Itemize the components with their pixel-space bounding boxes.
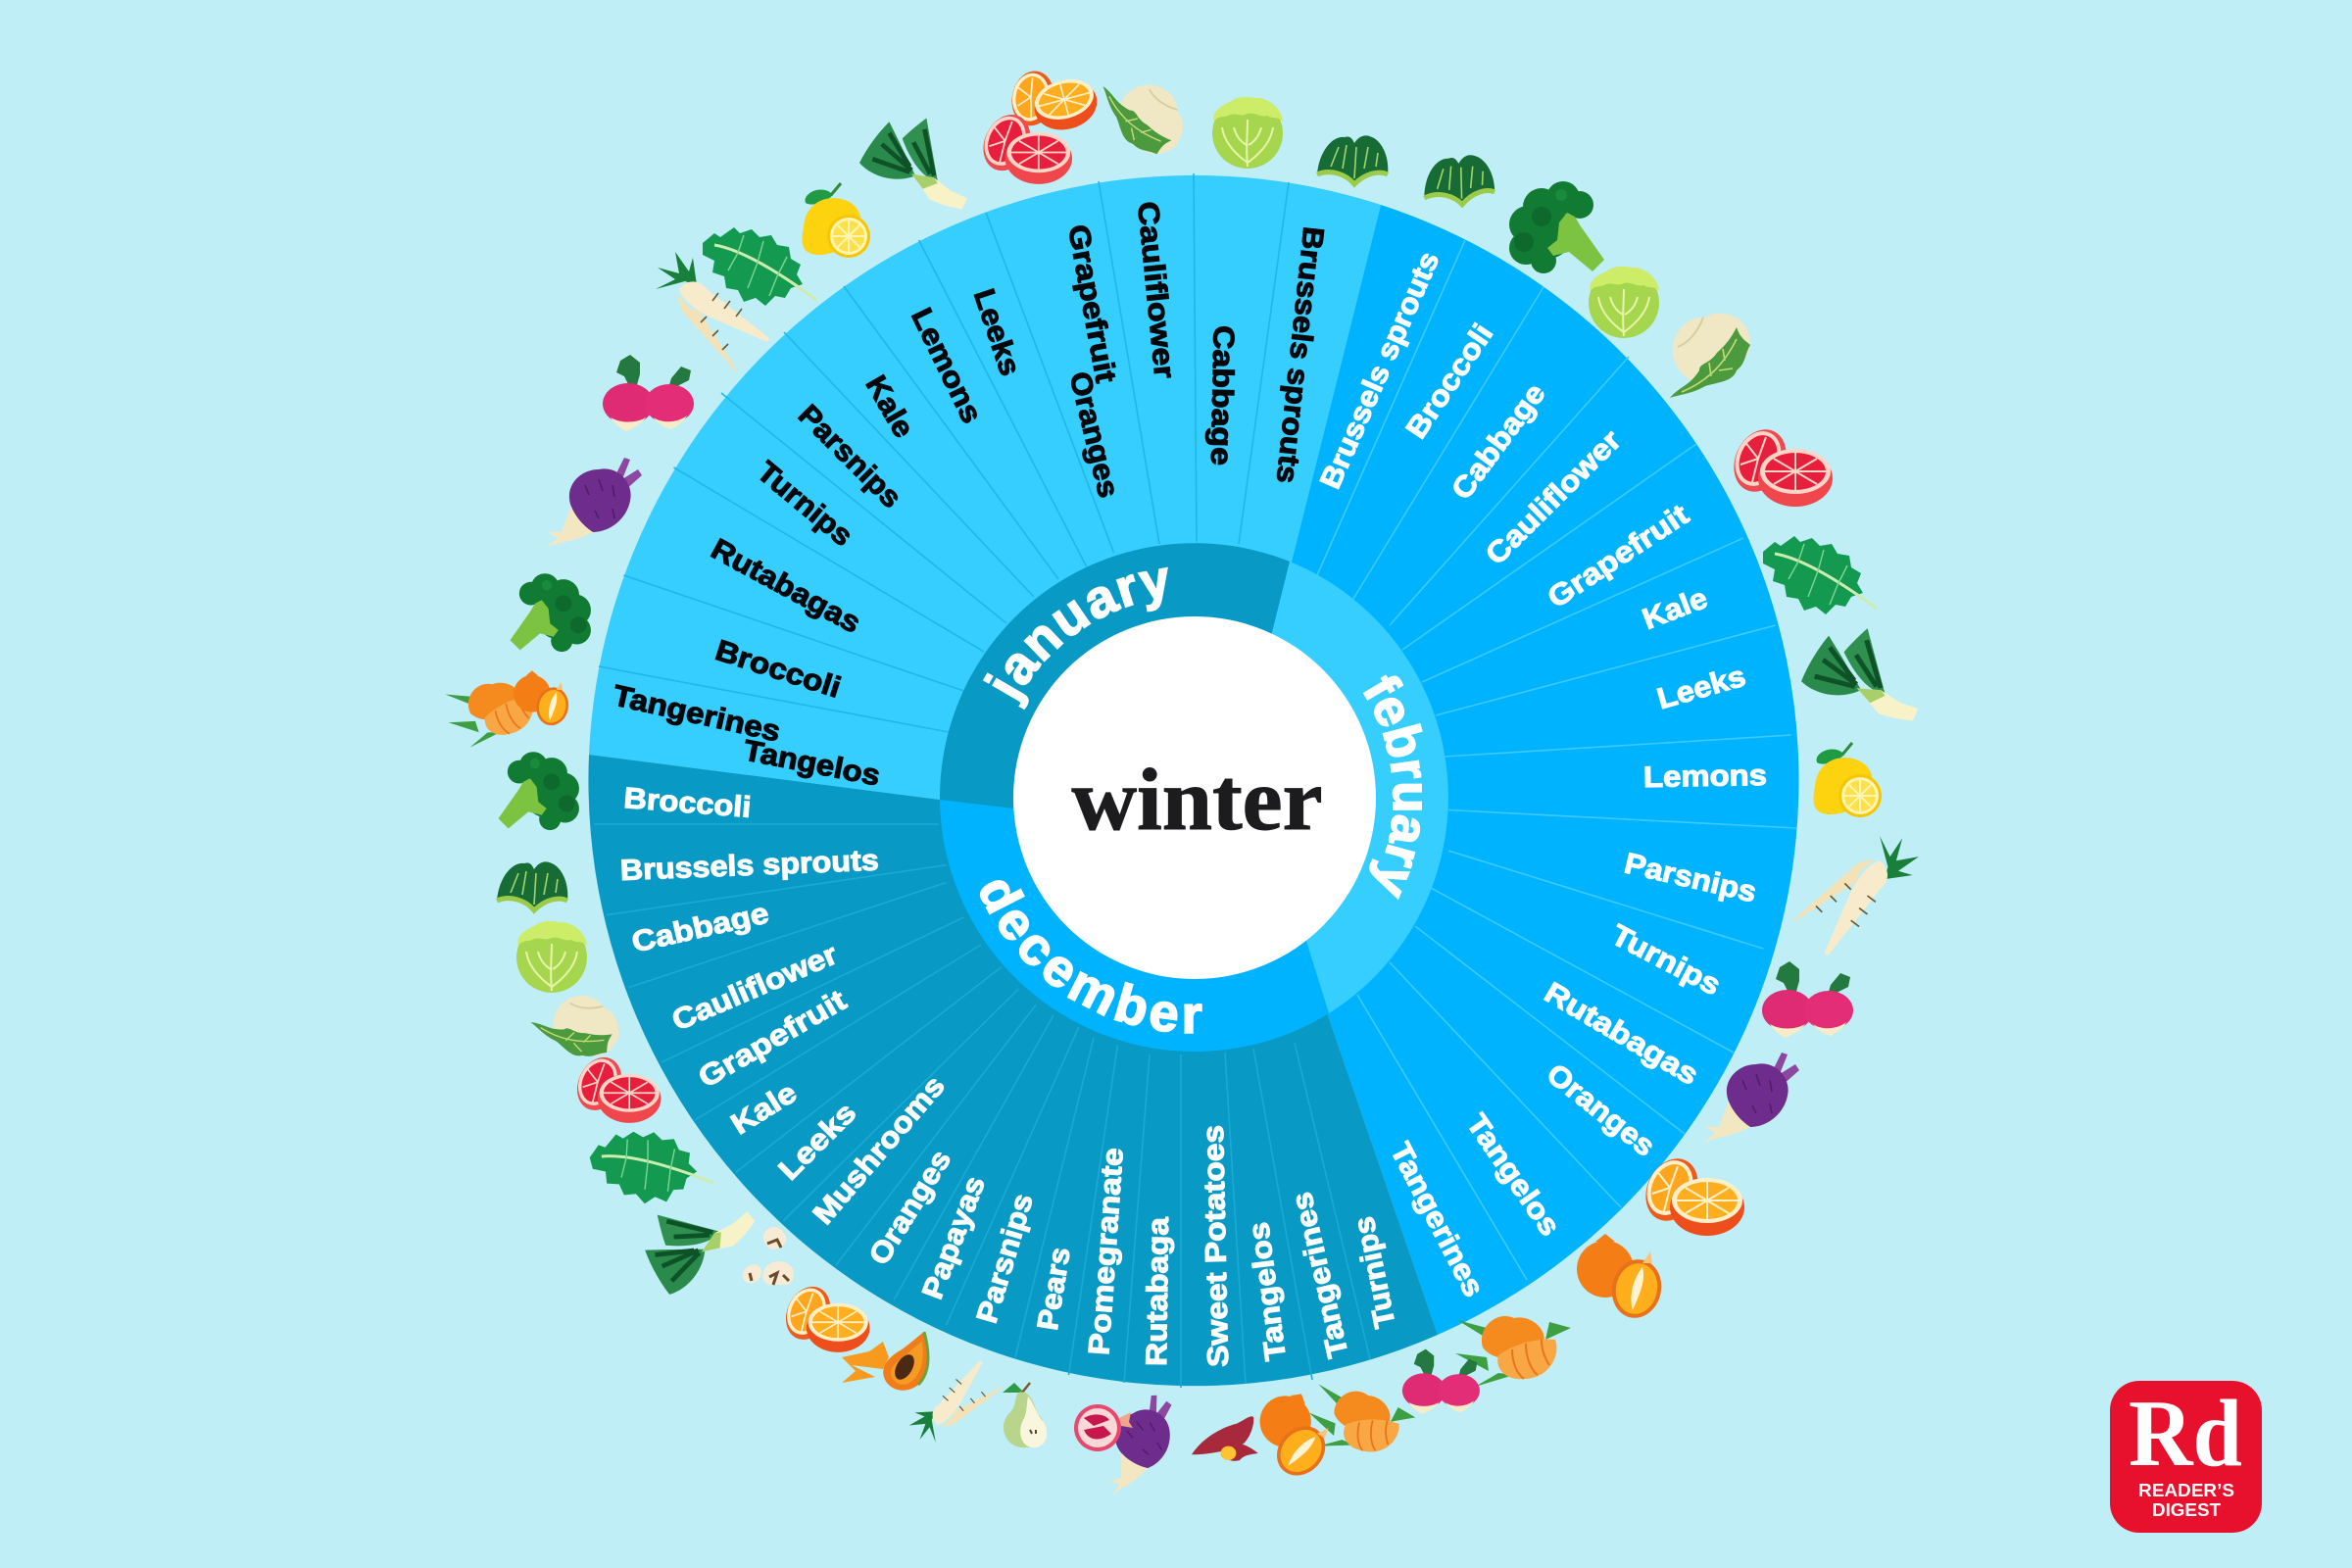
labels: february: Parsnips	[1621, 848, 1759, 908]
icon: rutabaga	[546, 458, 642, 548]
labels: january: Lemons	[905, 303, 988, 428]
icon: tangerine	[1455, 1316, 1571, 1387]
icon: rutabaga	[1703, 1053, 1799, 1143]
icon: grapefruit	[974, 107, 1072, 184]
labels: january: Oranges	[1062, 368, 1125, 501]
icon: grapefruit	[568, 1050, 661, 1123]
labels: february	[1314, 247, 1767, 1302]
labels: february: Broccoli	[1400, 318, 1499, 445]
labels: february: Brussels sprouts	[1314, 247, 1446, 494]
month label: february: february	[1362, 674, 1423, 900]
labels: february: Turnips	[1605, 918, 1726, 1003]
icon: broccoli	[510, 573, 591, 652]
labels: december: Turnips	[1348, 1214, 1402, 1331]
icon: pomegranate	[1074, 1404, 1133, 1451]
icon: cauliflower	[530, 981, 629, 1078]
ring: february	[1231, 562, 1448, 1013]
labels: january	[610, 200, 1329, 793]
icon: sweet potato	[1192, 1416, 1258, 1461]
icon: mushrooms	[743, 1227, 794, 1285]
title: winter: winter	[1072, 752, 1323, 849]
labels: february: Leeks	[1653, 661, 1749, 715]
labels: january: Parsnips	[792, 399, 907, 514]
labels: december: Tangelos	[1243, 1220, 1293, 1362]
labels: january: Grapefruit	[1061, 222, 1122, 385]
labels: december	[619, 782, 1402, 1367]
labels: january: Turnips	[751, 456, 858, 553]
icon: cabbage	[516, 921, 587, 993]
labels: december: Sweet Potatoes	[1198, 1125, 1235, 1367]
icon: cabbage	[1212, 97, 1283, 169]
labels: january: Tangelos	[741, 734, 883, 793]
labels: february: Lemons	[1643, 760, 1767, 794]
icon: orange halves	[1636, 1151, 1744, 1236]
labels: january: Rutabagas	[706, 533, 865, 640]
icon: leeks	[859, 118, 967, 210]
labels: december: Cauliflower	[667, 938, 843, 1038]
labels: february: Cabbage	[1446, 378, 1552, 506]
icon: turnips	[1402, 1349, 1480, 1414]
icon: kale	[1763, 536, 1877, 614]
icon: parsnip	[907, 1355, 1004, 1447]
labels: december: Grapefruit	[693, 984, 852, 1095]
panel: february produce	[1195, 205, 1799, 1335]
ring: january	[940, 543, 1290, 830]
labels: december: Mushrooms	[807, 1070, 952, 1231]
icon: cabbage	[1589, 267, 1659, 338]
labels: january: Cauliflower	[1131, 200, 1181, 380]
icon: tangelo	[514, 670, 572, 728]
labels: january: Cabbage	[1204, 325, 1240, 466]
labels: january: Leeks	[967, 285, 1026, 380]
labels: december: Oranges	[863, 1145, 957, 1271]
center circle	[1013, 616, 1376, 979]
icon: pear	[1003, 1383, 1047, 1447]
ring: december	[940, 798, 1329, 1052]
icon: kale	[586, 1113, 715, 1218]
icon: orange halves	[995, 50, 1102, 144]
icon: lemon	[1813, 743, 1882, 817]
icon: parsnip	[1793, 836, 1919, 956]
icon: orange halves	[777, 1279, 870, 1352]
labels: december: Parsnips	[971, 1190, 1040, 1327]
month label: december: december	[980, 880, 1202, 1034]
labels: january: Brussels sprouts	[1270, 225, 1329, 485]
labels: december: Brussels sprouts	[619, 845, 879, 887]
labels: december: Rutabaga	[1141, 1216, 1175, 1366]
labels: february: Kale	[1639, 582, 1712, 636]
wedge: january	[589, 175, 1381, 800]
labels: february: Cauliflower	[1480, 423, 1628, 571]
icon: broccoli	[498, 752, 579, 830]
icon: tangelo	[1577, 1234, 1667, 1323]
icon: grapefruit	[1724, 421, 1833, 507]
labels: december: Broccoli	[622, 782, 753, 824]
labels: january: Tangerines	[610, 679, 783, 749]
labels: february: Oranges	[1541, 1057, 1661, 1163]
icon: lemon	[802, 183, 870, 258]
labels: december: Cabbage	[629, 897, 771, 959]
logo: Reader's Digest	[2110, 1381, 2262, 1533]
icon: kale	[703, 227, 816, 306]
labels: december: Pomegranate	[1083, 1147, 1130, 1356]
icon: brussels sprouts	[1317, 135, 1388, 184]
icon: broccoli	[1509, 181, 1604, 273]
icon: leeks	[1797, 624, 1919, 730]
labels: january: Kale	[859, 370, 920, 443]
wedge: december	[588, 755, 1438, 1386]
logo: Reader's Digest: Rd	[2129, 1381, 2242, 1487]
icon: cauliflower	[1670, 314, 1750, 398]
month label: january: january	[982, 566, 1168, 710]
icon: brussels sprouts	[497, 861, 567, 910]
logo: Reader's Digest: DIGEST	[2152, 1500, 2221, 1520]
icon: tangerine	[443, 674, 550, 751]
labels: december: Papayas	[916, 1172, 992, 1303]
labels: february: Tangelos	[1460, 1108, 1566, 1242]
labels: december: Tangerines	[1286, 1189, 1355, 1360]
icon: leeks	[629, 1178, 758, 1314]
icon: turnips	[603, 355, 694, 431]
logo: Reader's Digest: READER’S	[2138, 1481, 2234, 1500]
icon: parsnip	[656, 252, 769, 371]
icon: rutabaga	[1085, 1390, 1194, 1495]
labels: february: Tangerines	[1384, 1138, 1490, 1302]
labels: february: Grapefruit	[1542, 499, 1694, 614]
icon: brussels sprouts	[1421, 153, 1495, 208]
labels: december: Pears	[1032, 1246, 1077, 1333]
labels: december: Kale	[725, 1076, 803, 1141]
labels: february: Rutabagas	[1539, 976, 1704, 1092]
icon: cauliflower	[1102, 79, 1185, 159]
panel: january produce	[589, 173, 1381, 800]
labels: december: Leeks	[772, 1097, 862, 1187]
wedge: february	[1195, 205, 1799, 1335]
icon: papaya	[842, 1332, 928, 1391]
panel: december produce	[588, 755, 1438, 1388]
icon: tangelo	[1240, 1381, 1349, 1491]
labels: january: Broccoli	[711, 634, 845, 705]
icon: turnips	[1762, 961, 1853, 1038]
icon: tangerine	[1301, 1380, 1418, 1468]
